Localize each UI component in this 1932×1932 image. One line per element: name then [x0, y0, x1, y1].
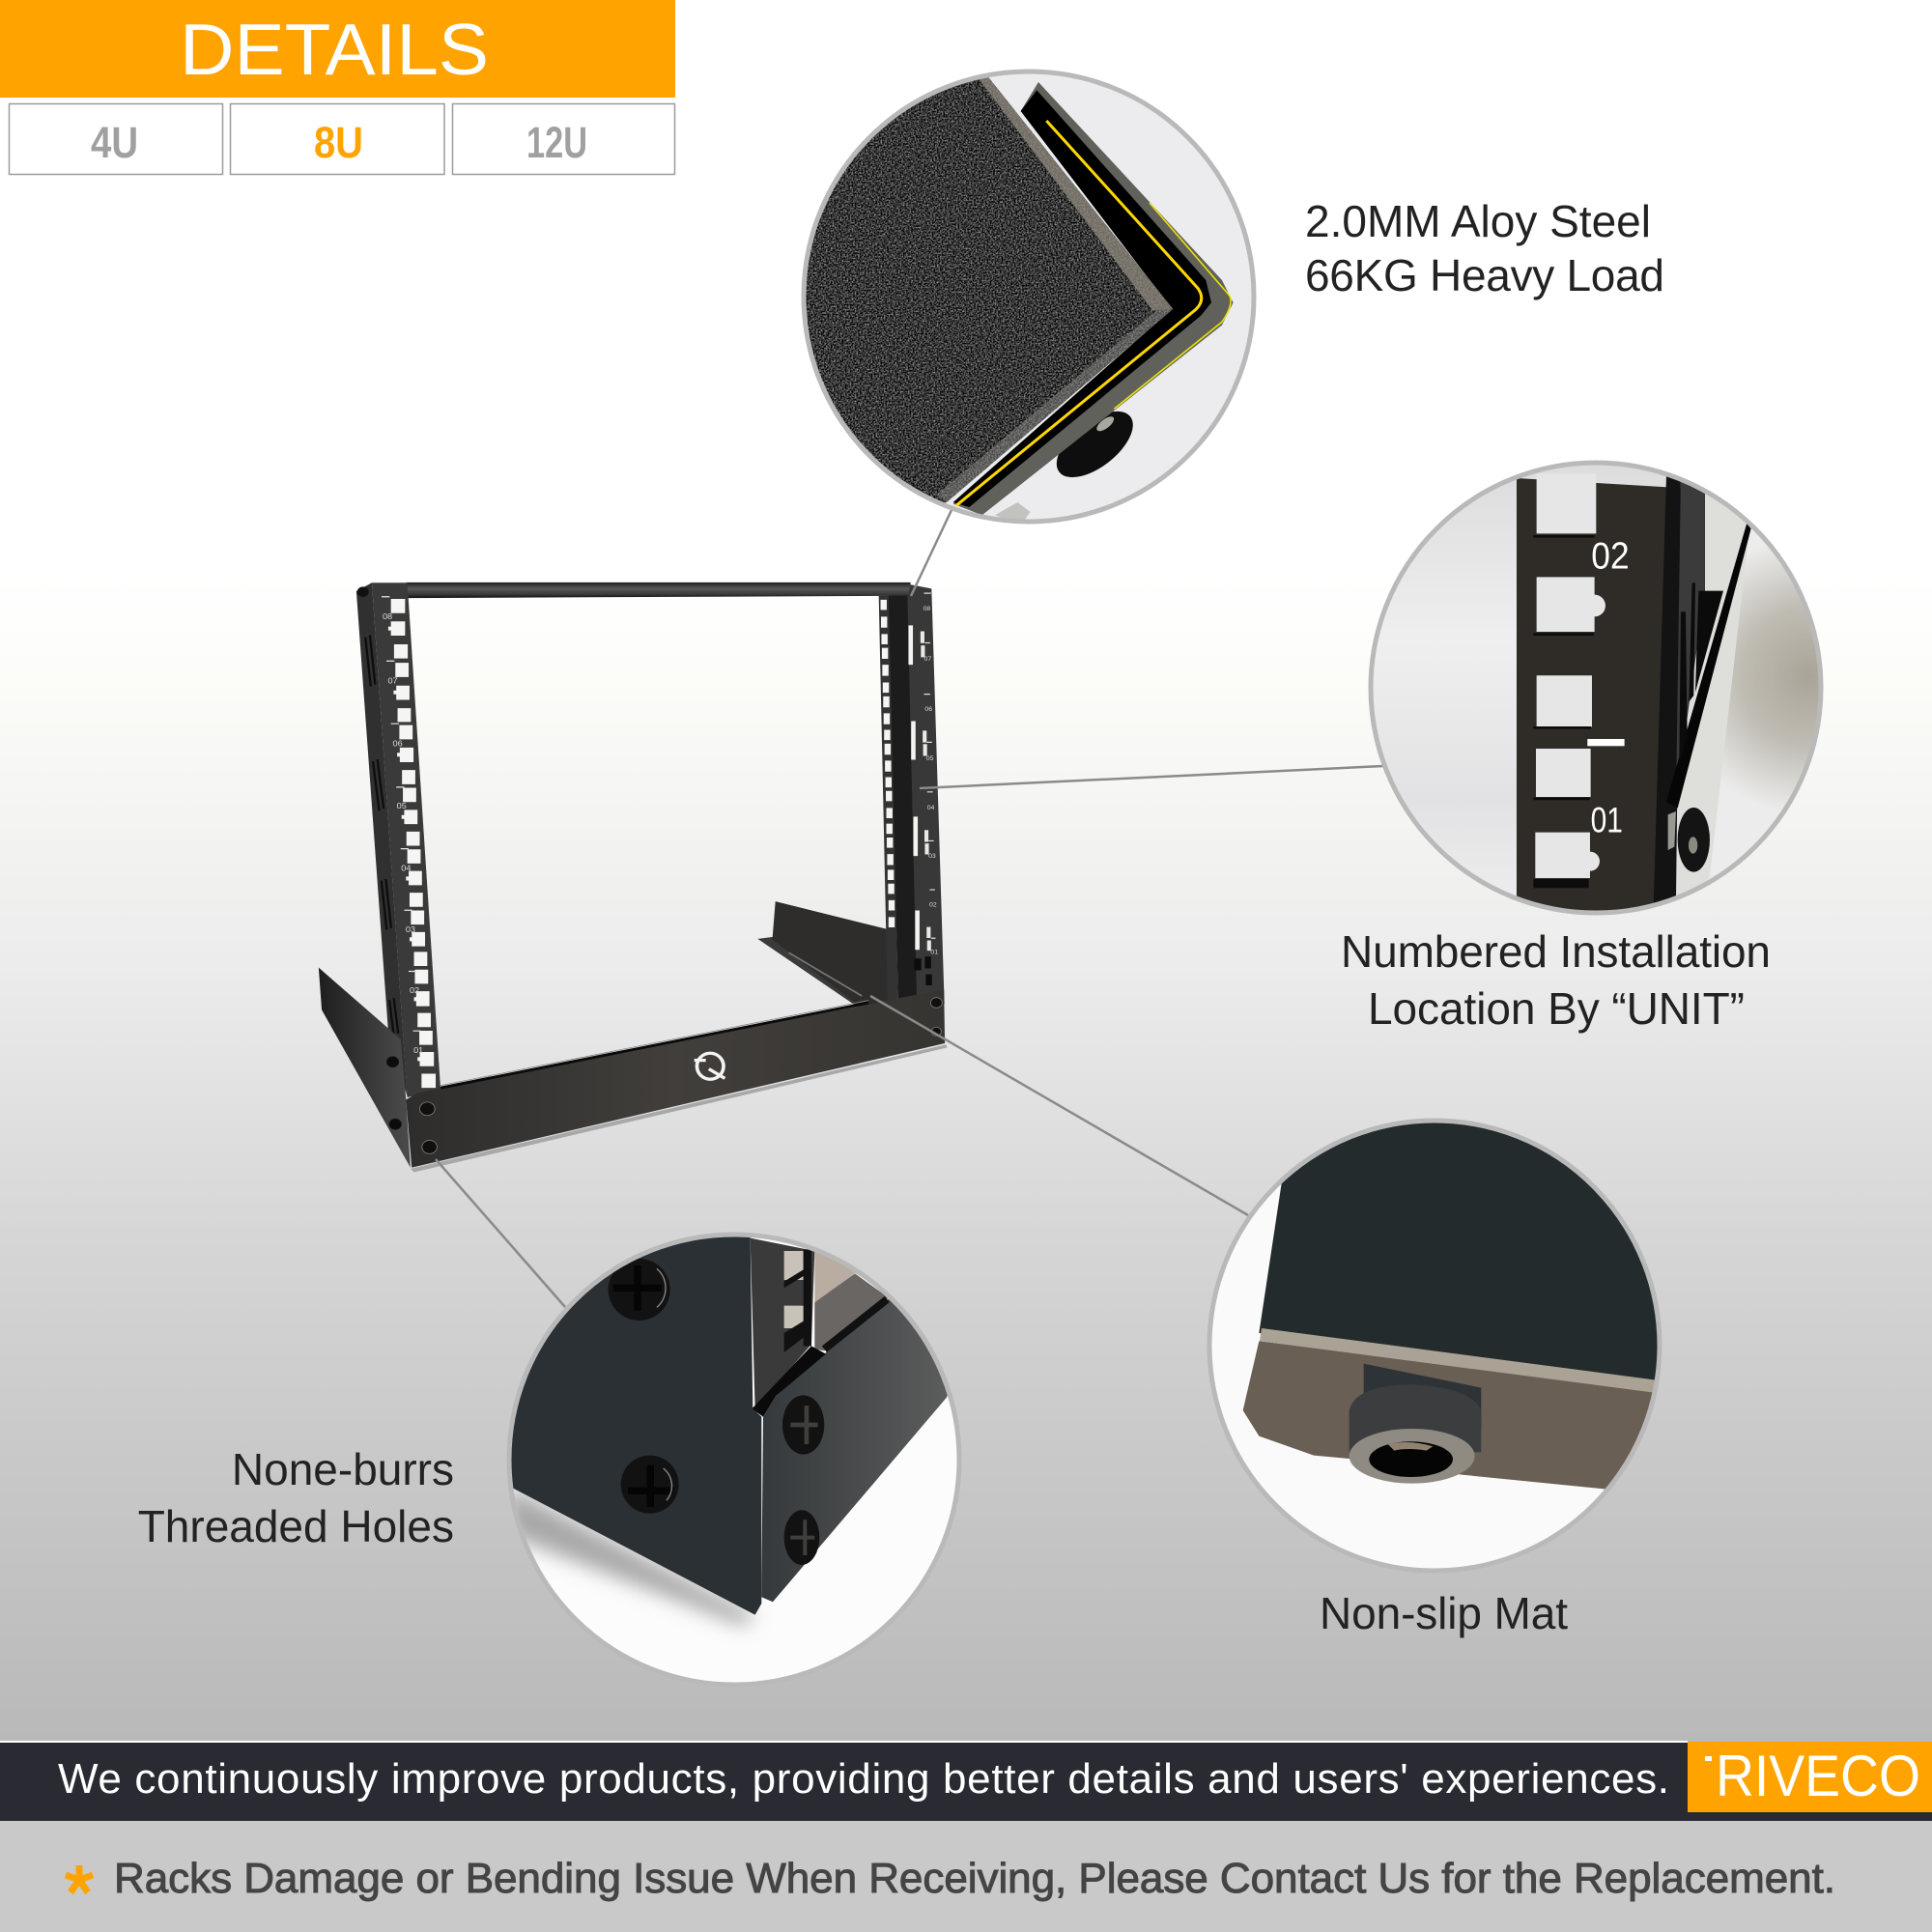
left post: 07 [387, 676, 398, 685]
left foot [319, 968, 411, 1168]
circle 3 dark top face [1259, 1122, 1658, 1379]
circle 2 unit marks: 02 [1591, 534, 1630, 577]
right post: 06 [924, 706, 932, 713]
right post [879, 583, 945, 1004]
circle 4 soft floor shadow [505, 1485, 755, 1626]
text: non-slip mat: Non-slip Mat [1320, 1588, 1568, 1638]
circle 3 rubber foot [1350, 1364, 1481, 1484]
right post: 04 [927, 805, 935, 811]
circle 2 screw [1678, 808, 1710, 872]
detail circle: numbered unit markings: 01 [1591, 801, 1623, 840]
text: threaded holes: None-burrs [232, 1444, 454, 1494]
product photo: open frame 8U rack [319, 582, 947, 1173]
header: details banner: DETAILS [180, 9, 489, 90]
warranty note band [0, 1821, 1932, 1932]
leader lines from rack to detail circles [436, 510, 1383, 1307]
right rear foot [757, 901, 890, 1009]
circle 4 upright post [751, 1238, 826, 1417]
detail circle: threaded holes [493, 1227, 976, 1685]
circle 3 folded edge [1260, 1328, 1671, 1395]
text: threaded holes [138, 1444, 454, 1551]
circle 4 inner foot face [814, 1273, 889, 1350]
left post: 02 [410, 985, 419, 995]
text: numbered installation location: Numbered Installation [1341, 926, 1771, 977]
right post: 03 [928, 853, 936, 860]
right post: 05 [926, 755, 934, 762]
brand logo block: RIVECO [1716, 1744, 1920, 1808]
circle 1 bolt [1057, 412, 1133, 477]
text: material and load [1305, 196, 1664, 300]
square mounting holes [391, 599, 436, 1088]
footer slogan band [0, 1741, 1932, 1821]
circle 4 rear wall [855, 1273, 869, 1283]
detail circle: non-slip mat [1208, 1119, 1662, 1573]
circle 4 right face [761, 1296, 956, 1602]
tab: 4U [10, 104, 222, 174]
rack floor shadow [411, 1044, 947, 1173]
warranty note band: Racks Damage or Bending Issue When Receiving, Please Contact Us for the Replacement. [114, 1855, 1835, 1902]
left post: 01 [413, 1046, 423, 1055]
circle 4 main dark face [493, 1227, 761, 1615]
left post: 04 [401, 864, 412, 873]
right post: 01 [930, 950, 938, 955]
tab: 4U: 4U [91, 118, 138, 167]
right post: 02 [929, 902, 937, 908]
text: numbered installation location: Location By “UNIT” [1368, 983, 1745, 1034]
circle 2 square holes [1535, 474, 1605, 878]
tab: 12U [452, 104, 674, 174]
circle 2 post [1517, 478, 1705, 947]
top cross bar [406, 582, 911, 598]
tab: 8U active: 8U [314, 118, 363, 167]
detail circle: numbered unit markings [1368, 460, 1824, 916]
front bar screws [420, 998, 942, 1153]
icon: orange asterisk [66, 1865, 93, 1892]
left post [356, 582, 440, 1097]
circle 3 brown side face [1242, 1341, 1652, 1490]
front base bar [406, 989, 945, 1168]
text: material and load: 2.0MM Aloy Steel [1305, 196, 1651, 246]
tab: 12U: 12U [526, 118, 587, 167]
detail circle: steel edge thickness [802, 70, 1256, 524]
right post: 07 [924, 656, 932, 663]
text: numbered installation location [1341, 926, 1771, 1034]
footer slogan band: We continuously improve products, providing better details and users' experiences. [58, 1755, 1669, 1803]
text: threaded holes: Threaded Holes [138, 1501, 454, 1551]
right post: 08 [923, 607, 931, 612]
text: material and load: 66KG Heavy Load [1305, 250, 1664, 300]
left post: 06 [393, 739, 403, 749]
circle 2 black bracket [1666, 524, 1751, 809]
size selector tabs [10, 104, 674, 174]
header: details banner [0, 0, 675, 98]
left post: 05 [397, 802, 407, 810]
circle 1 rear flange [953, 82, 1234, 515]
left post: 03 [406, 924, 415, 934]
brand logo mark [695, 1053, 724, 1079]
tab: 8U active [230, 104, 444, 174]
left post: 08 [383, 612, 392, 621]
circle 4 screws [609, 1259, 824, 1565]
circle 2 wall reflection [1676, 529, 1747, 895]
circle 1 textured panel [806, 77, 1173, 502]
